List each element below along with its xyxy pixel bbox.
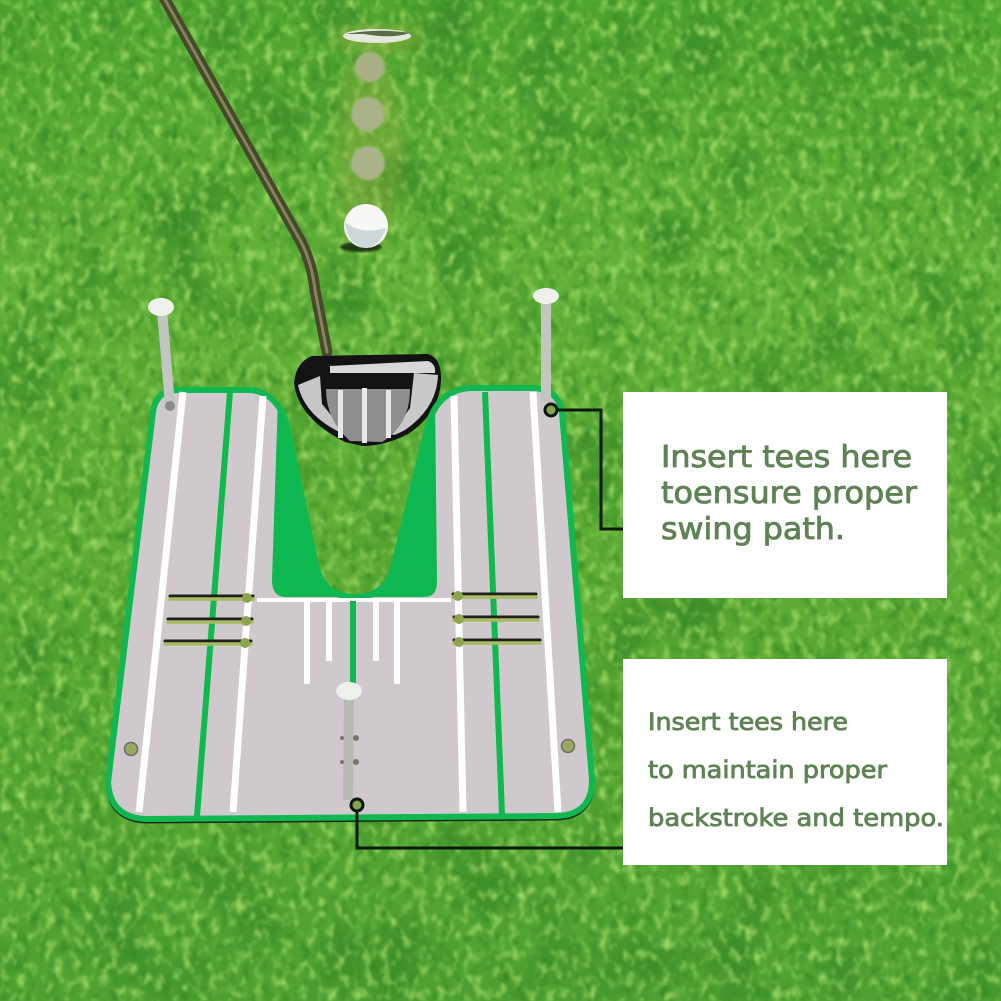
callout: backstroke and tempo: [623, 659, 947, 865]
callout connector: top: [545, 404, 624, 529]
callout text: swing path: Insert tees here: [661, 440, 912, 475]
icon: left tee: [148, 298, 175, 411]
left slots: [165, 593, 253, 648]
central tick marks: [257, 598, 451, 685]
callout text: backstroke and tempo: Insert tees here: [648, 708, 848, 736]
icon: golf hole: [333, 25, 421, 51]
icon: golf ball: [340, 204, 388, 252]
callout text: backstroke and tempo: [648, 708, 944, 832]
callout text: swing path: swing path.: [661, 512, 845, 547]
icon: putter shaft: [163, 0, 327, 352]
icon: centre tee: [336, 682, 362, 800]
green V cut-out surround: [272, 410, 437, 597]
left lobe guide lines: [139, 392, 263, 816]
right slots: [453, 591, 540, 647]
callout: swing path: [623, 392, 947, 598]
mounting holes: [124, 740, 574, 756]
callout text: swing path: [661, 440, 918, 547]
callout text: backstroke and tempo: to maintain proper: [648, 756, 887, 784]
icon: putter head: [294, 354, 441, 446]
callout connector: bottom: [351, 799, 624, 848]
callout text: swing path: toensure proper: [661, 476, 918, 511]
icon: right tee: [533, 288, 559, 402]
right lobe guide lines: [454, 392, 558, 814]
panel: alignment mirror mat: [108, 380, 592, 821]
callout text: backstroke and tempo: backstroke and tempo.: [648, 804, 944, 832]
icon: golf ball motion trail: [335, 50, 403, 250]
mat silver surface: [108, 388, 592, 819]
